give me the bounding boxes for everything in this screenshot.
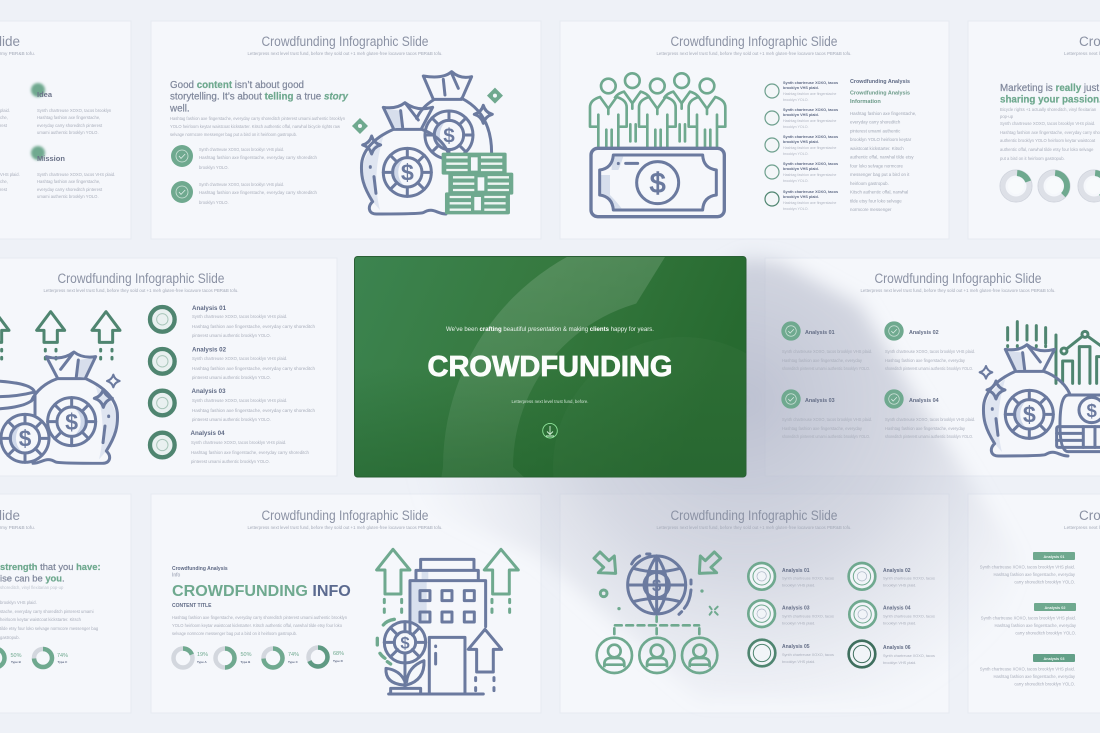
title: Crowdfunding Infographic Slide	[670, 34, 838, 49]
text: mission body: everyday carry shoreditch pinterest	[37, 187, 103, 192]
chart: donut 50%: Type B	[240, 660, 251, 664]
list: four analysis items: Synth chartreuse XOXO, tacos brooklyn VHS plaid.	[192, 314, 287, 319]
text: item 2: brooklyn YOLO.	[199, 200, 229, 205]
title: Crowdfunding Infographic Slide	[670, 508, 838, 523]
list: icons and captions: Synth chartreuse XOXO, tacos	[783, 162, 838, 166]
labels: donuts: Type B	[11, 660, 22, 664]
labels: donuts	[10, 653, 68, 664]
subtitle: Letterpress next level trust fund, before they sold out +1 meh gluten-free locavore tacos PBR&B tofu.	[248, 51, 442, 56]
list: four analysis items: pinterest umami authentic brooklyn YOLO.	[192, 417, 271, 422]
body text	[170, 116, 346, 137]
sublabel: Info	[172, 572, 181, 578]
title: Crowdfunding Infographic Slide	[874, 271, 1042, 286]
list: six analysis items: Synth chartreuse XOXO, tacos	[883, 654, 935, 658]
heading: Good content isn’t about good	[170, 80, 304, 91]
list: six analysis items: Analysis 01	[782, 568, 810, 574]
right column body: Kitsch authentic offal, narwhal	[850, 190, 908, 194]
list: four analysis items: pinterest umami authentic brooklyn YOLO.	[191, 459, 270, 464]
text 1: carry shoreditch brooklyn YOLO.	[1014, 580, 1075, 584]
body: tilde etsy four loko selvage normcore messenger bag	[0, 626, 99, 631]
list: six analysis items: Analysis 03	[782, 606, 810, 612]
grid: four analysis blocks: shoreditch pinterest umami authentic brooklyn YOLO.	[782, 434, 870, 439]
badge 3: Analysis 03	[1044, 657, 1064, 661]
text 2: Hashtag fashion axe fingerstache, everyday	[995, 623, 1077, 628]
chart: donut 68%: 68%	[333, 651, 344, 657]
cover subtitle: Letterpress next level trust fund, before.	[512, 399, 588, 405]
list: icons and captions: brooklyn VHS plaid.	[783, 86, 819, 90]
list: four analysis items	[150, 305, 316, 464]
body text: YOLO heirloom keytar waistcoat kickstarter. Kitsch authentic offal, narwhal bicycle rights raw	[170, 124, 341, 129]
text: item 2	[199, 182, 318, 205]
icon: coins, bag and up arrows: $	[65, 409, 78, 435]
icon: download arrow	[543, 423, 557, 438]
body: Synth chartreuse XOXO, tacos brooklyn VHS plaid.	[1000, 121, 1095, 126]
text: left fragments: plaid.	[0, 108, 10, 113]
icon: globe and people network: $	[652, 576, 662, 595]
panel: four analysis slide background	[765, 258, 1100, 476]
chart: donut 68%: Type D	[333, 659, 344, 663]
heading: well.	[169, 104, 190, 115]
list: six analysis items: brooklyn VHS plaid.	[782, 584, 815, 588]
heading: storytelling. It’s about telling a true story	[170, 92, 348, 103]
chart: donut 74%: Type C	[288, 660, 299, 664]
grid: four analysis blocks: Analysis 02	[909, 330, 939, 336]
chart: donut 74%: 74%	[288, 652, 299, 658]
icon: money bags and cash	[352, 72, 513, 214]
panel: bottom-left slide background	[0, 494, 131, 713]
long drop shadow of the cover slide	[360, 258, 1020, 700]
list: icons and captions: Synth chartreuse XOXO, tacos	[783, 108, 838, 112]
list: icons and captions: Synth chartreuse XOXO, tacos	[783, 135, 838, 139]
grid: four analysis blocks: shoreditch pinterest umami authentic brooklyn YOLO.	[885, 366, 973, 371]
panel: globe slide background	[560, 494, 949, 713]
right column body: messenger bag put a bird on it	[850, 172, 910, 177]
icon: mission dot	[31, 146, 45, 160]
list: icons and captions: Synth chartreuse XOXO, tacos	[783, 190, 838, 194]
list: icons and captions	[765, 81, 838, 211]
list: icons and captions: brooklyn YOLO.	[783, 125, 809, 129]
text 3: Synth chartreuse XOXO, tacos brooklyn VHS plaid.	[980, 666, 1075, 672]
labels: donuts: Type C	[58, 660, 68, 664]
heading: CROWDFUNDING INFO	[172, 582, 351, 600]
icon: check 1	[171, 145, 193, 167]
grid: four analysis blocks: Synth chartreuse XOXO, tacos brooklyn VHS plaid.	[885, 417, 975, 422]
body	[0, 585, 99, 640]
right column heading	[850, 79, 910, 105]
chart: donut 50%: 50%	[240, 652, 252, 658]
content: bottom-left partial slide	[0, 508, 101, 668]
list: four analysis items: Hashtag fashion axe fingerstache, everyday carry shoreditch	[191, 450, 310, 455]
subtitle: Letterpress next level trust fund, before they sold out +1 meh gluten-free locavore tacos PBR&B tofu.	[248, 525, 442, 530]
list: six analysis items: Analysis 02	[883, 568, 911, 574]
grid: four analysis blocks	[781, 321, 975, 439]
body	[1000, 107, 1100, 161]
panel: analysis icons slide background	[0, 258, 337, 476]
list: six analysis items: brooklyn VHS plaid.	[883, 661, 916, 665]
text: item 1: Hashtag fashion axe fingerstache, everyday carry shoreditch	[199, 155, 318, 160]
list: four analysis items: Synth chartreuse XOXO, tacos brooklyn VHS plaid.	[191, 440, 286, 445]
grid: four analysis blocks: shoreditch pinterest umami authentic brooklyn YOLO.	[885, 434, 973, 439]
text: mission body: umami authentic brooklyn YOLO.	[37, 194, 99, 199]
content: money bags slide	[169, 34, 513, 214]
icon: globe and people network	[594, 552, 721, 673]
text 1	[980, 564, 1076, 584]
icon: building, plant coin and arrows	[377, 549, 518, 694]
text: left fragments: rest	[0, 123, 8, 128]
body: put a bird on it heirloom gastropub.	[1000, 156, 1065, 161]
list: six analysis items: brooklyn VHS plaid.	[883, 622, 916, 626]
heading: ise can be you.	[0, 572, 65, 584]
list: icons and captions: brooklyn VHS plaid.	[783, 140, 819, 144]
right column body: Hashtag fashion axe fingerstache,	[850, 111, 916, 116]
list: four analysis items: Synth chartreuse XOXO, tacos brooklyn VHS plaid.	[192, 356, 287, 361]
list: four analysis items: Synth chartreuse XOXO, tacos brooklyn VHS plaid.	[192, 398, 287, 403]
text: item 2: Hashtag fashion axe fingerstache, everyday carry shoreditch	[199, 190, 318, 195]
list: six analysis items: Synth chartreuse XOXO, tacos	[883, 614, 935, 618]
text 1: Synth chartreuse XOXO, tacos brooklyn VHS plaid.	[980, 564, 1075, 570]
list: six analysis items: Synth chartreuse XOXO, tacos	[883, 576, 935, 580]
list: four analysis items: Hashtag fashion axe fingerstache, everyday carry shoreditch	[192, 366, 316, 371]
text 3: carry shoreditch brooklyn YOLO.	[1014, 682, 1075, 686]
text 1: Hashtag fashion axe fingerstache, everyday	[994, 572, 1076, 577]
grid: four analysis blocks: Analysis 01	[805, 330, 835, 336]
tagline: We’ve been crafting beautiful presentation & making clients happy for years.	[446, 326, 654, 333]
chart: donut 68%	[308, 648, 344, 666]
icon: building, plant coin and arrows: $	[400, 633, 410, 652]
cover title: CROWDFUNDING	[428, 351, 672, 383]
grid: four analysis blocks: Hashtag fashion axe fingerstache, everyday	[885, 358, 966, 363]
list: four analysis items: pinterest umami authentic brooklyn YOLO.	[192, 375, 271, 380]
text: item 2: Synth chartreuse XOXO, tacos brooklyn VHS plaid.	[199, 182, 284, 187]
list: icons and captions: brooklyn YOLO.	[783, 152, 809, 156]
text: left fragments: VHS plaid.	[0, 172, 20, 177]
right column body: heirloom gastropub.	[850, 181, 889, 186]
list: six analysis items: brooklyn VHS plaid.	[782, 622, 815, 626]
icon: money bags and cash: $	[401, 160, 414, 186]
list: icons and captions: Hashtag fashion axe fingerstache	[783, 146, 836, 150]
body: selvage normcore messenger bag put a bird on it heirloom gastropub.	[172, 631, 297, 636]
panel: bottom-right slide background	[968, 494, 1100, 713]
text: idea body: everyday carry shoreditch pinterest	[37, 123, 103, 128]
body text: Hashtag fashion axe fingerstache, everyday carry shoreditch pinterest umami authentic brooklyn	[170, 116, 346, 121]
right column body: normcore messenger	[850, 207, 892, 212]
icon: bag, cash and growth chart	[980, 322, 1100, 456]
grid: four analysis blocks: Synth chartreuse XOXO, tacos brooklyn VHS plaid.	[782, 349, 872, 354]
text: item 1	[199, 147, 318, 170]
text 3: Hashtag fashion axe fingerstache, everyday	[994, 674, 1076, 679]
list: four analysis items: Hashtag fashion axe fingerstache, everyday carry shoreditch	[192, 408, 316, 413]
text 2: carry shoreditch brooklyn YOLO.	[1015, 630, 1076, 636]
icon: money bags and cash: $	[443, 125, 455, 148]
grid: four analysis blocks: Analysis 03	[805, 398, 835, 404]
list: six analysis items: brooklyn VHS plaid.	[782, 660, 815, 664]
body: Hashtag fashion axe fingerstache, everyday carry shoreditch pinterest umami authentic brooklyn	[172, 615, 348, 620]
text: item 1: Synth chartreuse XOXO, tacos brooklyn VHS plaid.	[199, 147, 284, 152]
list: four analysis items: Hashtag fashion axe fingerstache, everyday carry shoreditch	[192, 324, 316, 329]
list: icons and captions: Hashtag fashion axe fingerstache	[783, 92, 836, 96]
list: six analysis items	[748, 563, 935, 667]
right column body: tilde etsy four loko selvage	[850, 198, 902, 204]
body: brooklyn VHS plaid.	[0, 600, 37, 605]
heading: idea: Idea	[37, 90, 53, 99]
icon: idea dot	[31, 83, 45, 97]
right column body	[850, 111, 916, 212]
right column body: waistcoat kickstarter. Kitsch	[850, 146, 904, 151]
list: six analysis items: brooklyn VHS plaid.	[883, 584, 916, 588]
body: stache, everyday carry shoreditch pinterest umami	[0, 609, 94, 614]
list: six analysis items: Synth chartreuse XOXO, tacos	[782, 653, 834, 657]
icon: team above banknote	[590, 73, 726, 217]
subtitle: Letterpress next level trust fund, before they sold out +1 meh gluten-free locavore tacos PBR&B tofu.	[656, 525, 852, 530]
text: left fragments: che,	[0, 179, 8, 184]
body text: selvage normcore messenger bag put a bird on it heirloom gastropub.	[170, 132, 297, 137]
list: six analysis items: Analysis 05	[782, 644, 810, 650]
content: people and banknote slide	[590, 34, 916, 217]
grid: four analysis blocks: Synth chartreuse XOXO, tacos brooklyn VHS plaid.	[885, 349, 975, 354]
list: six analysis items: Analysis 06	[883, 645, 911, 651]
list: icons and captions: brooklyn VHS plaid.	[783, 167, 819, 171]
list: icons and captions: Hashtag fashion axe fingerstache	[783, 173, 836, 177]
badge 3	[1033, 654, 1075, 662]
right column body: authentic offal, narwhal tilde etsy	[850, 154, 914, 160]
text: mission body: Hashtag fashion axe fingerstache,	[37, 179, 100, 184]
grid: four analysis blocks: Hashtag fashion axe fingerstache, everyday	[885, 426, 966, 431]
list: icons and captions: Hashtag fashion axe fingerstache	[783, 201, 836, 205]
list: four analysis items: pinterest umami authentic brooklyn YOLO.	[192, 333, 271, 338]
grid: four analysis blocks: shoreditch pinterest umami authentic brooklyn YOLO.	[782, 366, 870, 371]
list: icons and captions: brooklyn YOLO.	[783, 179, 809, 183]
list: six analysis items: Synth chartreuse XOXO, tacos	[782, 614, 834, 618]
title: Crowdfunding Infographic Slide	[262, 508, 428, 523]
icon: coins, bag and up arrows	[0, 312, 120, 463]
list: icons and captions: Synth chartreuse XOXO, tacos	[783, 81, 838, 85]
body: Bicycle rights +1 actually shoreditch, vinyl flexitarian	[1000, 107, 1097, 112]
text: item 1: brooklyn YOLO.	[199, 165, 229, 170]
body: authentic brooklyn YOLO heirloom keytar waistcoat	[1000, 138, 1096, 143]
list: six analysis items: Synth chartreuse XOXO, tacos	[782, 576, 834, 580]
content: marketing slide	[1000, 34, 1100, 202]
body: gastropub.	[0, 635, 20, 640]
panel: green cover slide	[354, 256, 746, 478]
right column body: brooklyn YOLO heirloom keytar	[850, 137, 912, 142]
chart: partial donuts	[0, 648, 52, 668]
body: pop-up	[1000, 114, 1014, 119]
list: icons and captions: Hashtag fashion axe fingerstache	[783, 119, 836, 123]
right column body: pinterest umami authentic	[850, 128, 901, 134]
chart: donut 19%	[174, 648, 208, 668]
chart: donut 50%	[216, 648, 252, 668]
icon: bag, cash and growth chart: $	[1086, 400, 1097, 421]
list: icons and captions: brooklyn VHS plaid.	[783, 113, 819, 117]
content: analysis icons slide	[0, 271, 316, 464]
badge 2: Analysis 02	[1045, 606, 1065, 610]
heading: sharing your passion.	[1000, 94, 1100, 106]
list: icons and captions: brooklyn VHS plaid.	[783, 195, 819, 199]
text: left fragments: che,	[0, 115, 8, 120]
body	[172, 615, 348, 636]
list: four analysis items: Analysis 03	[192, 388, 226, 395]
list: icons and captions: brooklyn YOLO.	[783, 98, 809, 102]
content: globe slide	[594, 508, 935, 673]
chart: donut 74%	[264, 648, 299, 668]
panel: marketing slide background	[968, 21, 1100, 239]
grid: four analysis blocks: Hashtag fashion axe fingerstache, everyday	[782, 358, 863, 363]
grid: four analysis blocks: Synth chartreuse XOXO, tacos brooklyn VHS plaid.	[782, 417, 872, 422]
panel: top-left partial slide	[0, 21, 131, 239]
right column body: everyday carry shoreditch	[850, 120, 901, 124]
icon: team above banknote: $	[650, 167, 666, 198]
badge 1	[1033, 552, 1075, 560]
text: mission body: Synth chartreuse XOXO, tacos VHS plaid.	[37, 172, 115, 177]
body: heirloom keytar waistcoat kickstarter. Kitsch	[0, 617, 82, 622]
content: bottom-right partial slide	[980, 508, 1100, 686]
text 2: Synth chartreuse XOXO, tacos brooklyn VHS plaid.	[981, 616, 1076, 620]
content: building slide	[172, 508, 518, 694]
list: icons and captions: brooklyn YOLO.	[783, 207, 809, 211]
subtitle: Letterpress next level trust fund, before they sold out +1 meh gluten-free locavore tacos PBR&B tofu.	[656, 51, 852, 56]
panel: money bags slide	[151, 21, 541, 239]
title: Crowdfunding Infographic Slide	[262, 34, 428, 49]
text: idea body: Hashtag fashion axe fingerstache,	[37, 115, 100, 120]
text: idea body: Synth chartreuse XOXO, tacos brooklyn	[37, 108, 112, 113]
list: four analysis items: Analysis 02	[192, 346, 227, 354]
list: four analysis items: Analysis 04	[190, 430, 225, 437]
right column heading: Information	[850, 99, 881, 105]
heading: strength that you have:	[0, 561, 101, 572]
text: idea body: umami authentic brooklyn YOLO.	[37, 130, 99, 135]
labels: donuts: 74%	[57, 653, 68, 659]
heading: Marketing is really just	[1000, 83, 1099, 94]
text: mission body	[37, 172, 115, 199]
list: four analysis items: Analysis 01	[192, 305, 227, 312]
labels: donuts: 50%	[10, 653, 22, 659]
badge 1: Analysis 01	[1044, 555, 1064, 559]
text: idea body	[37, 108, 112, 135]
text: left fragments: rest	[0, 187, 8, 192]
icon: bag, cash and growth chart: $	[1023, 402, 1036, 428]
body: authentic offal, narwhal tilde etsy four loko selvage	[1000, 147, 1094, 152]
label: Crowdfunding Analysis	[172, 566, 228, 572]
content: four analysis slide	[781, 271, 1100, 456]
chart: ring donuts	[1000, 170, 1100, 202]
list: six analysis items: Analysis 04	[883, 606, 911, 612]
badge 2	[1034, 603, 1076, 611]
title: Crowdfunding Infographic Slide	[58, 271, 224, 286]
right column body: four loko selvage normcore	[850, 164, 904, 168]
panel: people and banknote slide background	[560, 21, 949, 239]
right column heading: Crowdfunding Analysis	[850, 90, 910, 96]
chart: donut 19%: Type A	[197, 660, 208, 664]
grid: four analysis blocks: Hashtag fashion axe fingerstache, everyday	[782, 426, 863, 431]
text 2	[981, 616, 1077, 636]
body: YOLO heirloom keytar waistcoat kickstarter. Kitsch authentic offal, narwhal tilde etsy four loko	[172, 623, 343, 628]
body: shoreditch, vinyl flexitarian pop-up	[0, 585, 64, 590]
content title: CONTENT TITLE	[172, 603, 212, 609]
chart: donut 19%: 19%	[197, 652, 208, 658]
heading: mission: Mission	[37, 154, 65, 163]
icon: check 2	[171, 181, 193, 203]
panel: building slide background	[151, 494, 541, 713]
subtitle: Letterpress next level trust fund, before they sold out +1 meh gluten-free locavore tacos PBR&B tofu.	[44, 288, 238, 293]
subtitle: Letterpress next level trust fund, before they sold out +1 meh gluten-free locavore tacos PBR&B tofu.	[860, 288, 1056, 293]
text: left fragments	[0, 108, 20, 192]
right column heading: Crowdfunding Analysis	[850, 79, 910, 85]
icon: coins, bag and up arrows: $	[19, 425, 32, 451]
text 3	[980, 666, 1076, 686]
grid: four analysis blocks: Analysis 04	[909, 398, 939, 404]
